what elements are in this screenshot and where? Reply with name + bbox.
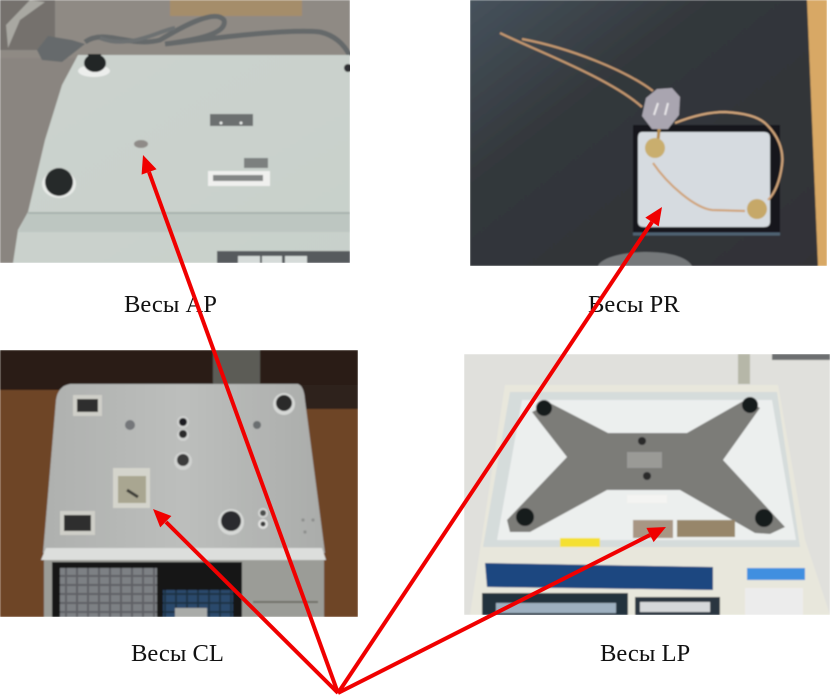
connector ports xyxy=(73,395,102,416)
caption: Весы AP: Весы АР xyxy=(124,291,217,318)
photo: LP scale xyxy=(464,354,830,615)
caption: Весы CL: Весы CL xyxy=(131,640,224,667)
arrow: to LP scale xyxy=(338,527,666,693)
photo: CL scale xyxy=(0,350,358,617)
gray X plate xyxy=(507,400,785,534)
photo: PR scale xyxy=(470,0,827,266)
caption: Весы PR: Весы PR xyxy=(588,291,680,318)
arrow: to AP scale xyxy=(142,155,338,693)
arrow: to PR scale xyxy=(338,207,662,693)
arrow: to CL scale xyxy=(153,509,338,693)
photo: AP scale xyxy=(0,0,352,263)
caption: Весы LP: Весы LP xyxy=(600,640,690,667)
